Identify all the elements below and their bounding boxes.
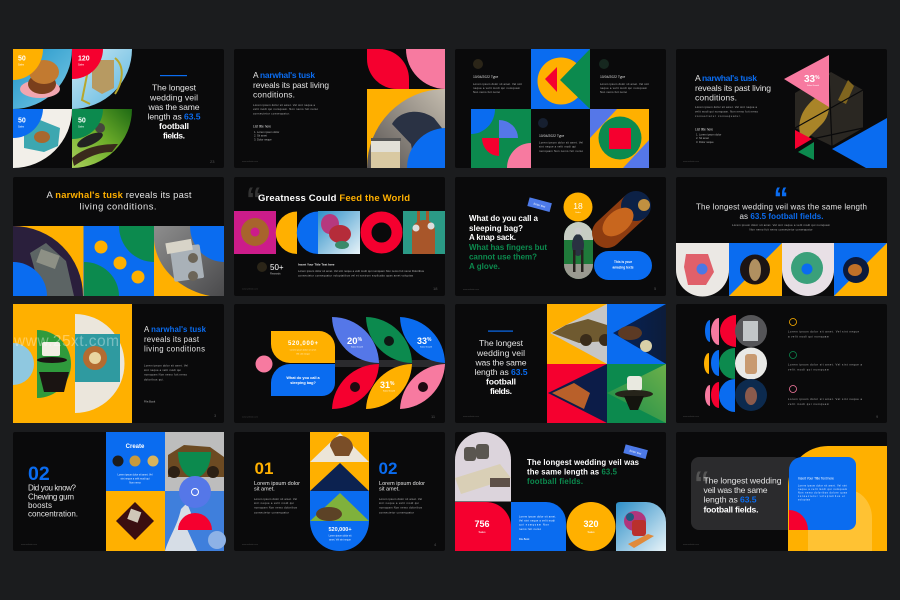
- decorative quote mark: “: [694, 465, 710, 501]
- tile: create: Create: [126, 444, 145, 450]
- column 2: consectetur consequatur: [379, 511, 414, 515]
- blue text card: consectetur voluptatibus et: [798, 495, 845, 498]
- footer: www.website.com: [683, 543, 699, 546]
- footer: www.website.com: [242, 416, 258, 418]
- half circle: toast: [13, 343, 34, 385]
- body text: velit modi qui numquam. Non nemo fuit nemo: [253, 107, 318, 111]
- list: List title here: [695, 128, 713, 132]
- page number: 4: [434, 542, 437, 547]
- item 3: Lorem ipsum dolor sit amet. Vel sint neque a: [788, 397, 862, 401]
- heading: conditions.: [695, 92, 737, 102]
- quote text: football: [159, 121, 189, 131]
- item 2: [788, 352, 862, 372]
- caption: Lorem ipsum dolor sit amet. Vel sint neque a velit modi qui numquam: [732, 223, 831, 227]
- row 3 shapes: [705, 379, 767, 412]
- note 3: [538, 118, 584, 153]
- stat: 320 sales: 320: [583, 519, 599, 529]
- stat: 756 sales: 756: [474, 519, 490, 529]
- body text: Lorem ipsum dolor sit amet. Vel sint neque a: [253, 103, 316, 107]
- shape: red ring: [366, 217, 397, 248]
- riddle text: What has fingers but: [469, 243, 547, 252]
- yellow callout: Vel sint neque: [296, 352, 311, 356]
- photo panel: lamp: [72, 49, 132, 109]
- fact text: boosts: [28, 501, 52, 510]
- quote text: football fields.: [527, 477, 583, 486]
- column 1: Lorem ipsum dolor sit amet. Vel: [254, 497, 297, 501]
- quote text: the same length as 63.5: [527, 468, 617, 477]
- column 2: sint neque a velit modi qui: [379, 501, 419, 505]
- watermark: www.25xt.com: [13, 333, 119, 350]
- leaf: 33 percent: Sales Growth: [420, 346, 432, 348]
- arch photo: power strip: [455, 432, 511, 502]
- note 2: Lorem ipsum dolor sit amet. Vel sint: [600, 82, 649, 86]
- circle icon badge: [179, 476, 211, 508]
- half circle: hat: [37, 330, 71, 398]
- tag: blue label: Enter text: [629, 449, 642, 456]
- tile: quarter circles: [471, 109, 531, 168]
- row 2 shapes: [704, 348, 767, 380]
- slide 10: leaf chart: [234, 304, 445, 423]
- note 3: Lorem ipsum dolor sit amet. Vel: [539, 140, 583, 144]
- blue pill callout: amazing texts: [612, 266, 634, 270]
- gray quote card: [691, 457, 801, 530]
- page number: 3: [214, 413, 217, 418]
- tile: bird on blue: [165, 491, 226, 551]
- tile: blue and yellow with creature: [834, 243, 887, 296]
- photo panel: teal creature: 50: [18, 118, 26, 124]
- column 1: 01: [254, 459, 273, 478]
- footer: www.website.com: [242, 160, 258, 163]
- pink triangle with stat: %: [815, 75, 820, 81]
- pink triangle with stat: Sales Growth: [807, 84, 819, 87]
- riddle text: sleeping bag?: [469, 224, 523, 233]
- decorative quote mark: “: [246, 181, 262, 217]
- list: List title here: [253, 124, 271, 128]
- note 2: neque a velit modi qui numquam: [600, 86, 648, 90]
- stem: [335, 360, 445, 367]
- tag: blue label: Enter text: [533, 202, 546, 209]
- tile: create: sint neque a velit modi qui: [121, 478, 150, 480]
- riddle text: What do you call a: [469, 214, 539, 223]
- blue text card: qui numquam Non: [519, 524, 550, 527]
- tile: car with green dome: [165, 432, 224, 491]
- capsule photo: orange creature: [597, 191, 651, 242]
- number: 02: [28, 463, 50, 485]
- body text: Lorem ipsum dolor sit amet. Vel: [144, 364, 188, 368]
- note 3: sint neque a velit modi qui: [539, 144, 576, 148]
- item 2: velit modi qui numquam: [788, 368, 830, 372]
- note 1: 10/04/2022 Type: [473, 75, 498, 79]
- text block: Insert Your Title Text here: [298, 262, 335, 266]
- blue text card: neque a velit modi qui numquam: [798, 488, 847, 491]
- fact text: concentration.: [28, 510, 78, 519]
- heading: reveals its past living: [695, 83, 771, 93]
- photo: golden figure hexagon: [795, 72, 863, 146]
- blue text card: Lorem ipsum dolor sit amet.: [519, 516, 556, 518]
- body text: consectetur consequatur.: [695, 114, 741, 118]
- body text: velit modi qui numquam. Non nemo fuit nemo: [695, 110, 758, 114]
- leaf: 33 percent: 33: [417, 336, 427, 346]
- tile: diamond photo: [106, 491, 165, 551]
- pink triangle with stat: 33: [804, 74, 815, 85]
- panel: train photo: [13, 226, 84, 296]
- list: 2. Sit amet: [696, 136, 709, 140]
- body text: numquam Non nemo fuit nemo: [144, 372, 188, 376]
- column 2: 02: [378, 459, 397, 478]
- photo panel: teal creature: [13, 109, 72, 168]
- tile: green donut: [782, 243, 834, 296]
- quote text: as 63.5 football fields.: [740, 212, 824, 221]
- text block: Lorem ipsum dolor sit amet. Vel sint neque a velit modi qui numquam Non nemo fuit nemo Doloribus: [298, 269, 425, 273]
- leaf: red with icon: [332, 364, 379, 409]
- slide 12: half circle rows with icons and text: [676, 304, 887, 423]
- blue text card: voluptas: [798, 498, 811, 502]
- heading: reveals its past living: [253, 80, 329, 90]
- body text: sint neque a velit modi qui: [144, 368, 181, 372]
- heading: living conditions: [144, 345, 205, 354]
- slide 5: narwhal tusk with three panels: [13, 177, 224, 296]
- item 1: a velit modi qui numquam: [788, 334, 830, 338]
- green triangle: [798, 142, 814, 160]
- photo panel: muffin: 50: [18, 56, 26, 62]
- riddle text: A glove.: [469, 262, 500, 271]
- footer: www.website.com: [463, 415, 479, 418]
- footer: www.website.com: [242, 288, 258, 290]
- page number: 11: [431, 414, 436, 419]
- item 3: velit modi qui numquam: [788, 402, 830, 406]
- quote text: wedding veil: [149, 92, 198, 102]
- quote text: football: [486, 377, 516, 387]
- leaf: 33 percent: [400, 317, 445, 363]
- quote text: football fields.: [704, 504, 758, 514]
- leaf: 33 percent: %: [427, 337, 432, 343]
- tag: blue label: [527, 197, 552, 212]
- quote text: length as 63.5: [474, 367, 528, 377]
- blue text card: Non nemo doloribus dolore quas: [798, 492, 848, 494]
- blue triangle: [832, 118, 887, 168]
- blue text card: Vel sint neque a velit modi: [519, 520, 555, 522]
- column 2: sit amet.: [379, 487, 400, 493]
- note 1: Lorem ipsum dolor sit amet. Vel sint: [473, 82, 522, 86]
- leaf: 31 percent: Sales Growth: [383, 390, 395, 392]
- pink node: [256, 356, 272, 372]
- page number: 5: [654, 286, 657, 291]
- shape: red leaf: [367, 49, 409, 89]
- column 1: consectetur consequatur: [254, 511, 289, 515]
- photo panel: bird on branch: Sales: [78, 126, 85, 128]
- yellow stat circle: Sales: [575, 212, 582, 214]
- stat: 756 sales: Sales: [478, 530, 486, 534]
- tile: car: [547, 304, 611, 364]
- panel: dots on blue and green: [84, 226, 154, 296]
- column 2: numquam Non nemo doloribus: [379, 506, 423, 510]
- quote text: was the same: [148, 102, 200, 112]
- tile: orange creature: [547, 364, 607, 423]
- item 2: Lorem ipsum dolor sit amet. Vel sint neque a: [788, 362, 862, 366]
- footer: www.website.com: [463, 288, 479, 291]
- yellow stat circle: 18: [573, 201, 583, 211]
- stat: 320 sales: Sales: [588, 530, 595, 534]
- stat: 320 sales: [566, 502, 616, 551]
- half circle: teal machine: [75, 314, 124, 413]
- list: 1. Lorem ipsum dolor: [696, 132, 721, 136]
- body text: consectetur consequatur.: [253, 112, 290, 116]
- stat: rewards: 50+: [270, 263, 284, 272]
- blue pill callout: [594, 251, 652, 280]
- stat: rewards: [257, 262, 284, 276]
- blue pill callout: This is your: [614, 260, 633, 264]
- page number: 9: [876, 414, 879, 419]
- note 3: 10/04/2022 Type: [539, 134, 564, 138]
- heading: A narwhal's tusk: [253, 70, 315, 80]
- leaf: pink with icon: [400, 364, 445, 409]
- heading: A narwhal's tusk: [695, 73, 757, 83]
- quote text: fields.: [490, 386, 512, 396]
- leaf: green with icon: [366, 317, 412, 363]
- tile: circle and square: [590, 109, 649, 168]
- fact text: Chewing gum: [28, 492, 74, 501]
- slide 4: narwhal tusk with triangle mosaic: [676, 49, 887, 168]
- row 1 shapes: [705, 315, 767, 347]
- heading: Greatness Could Feed the World: [258, 193, 410, 204]
- yellow panel: [13, 304, 132, 423]
- quote text: length as 63.5: [148, 112, 200, 122]
- photo panel: lamp: 120: [78, 56, 90, 62]
- heading: reveals its past: [144, 335, 200, 344]
- leaf: 31 percent: %: [390, 381, 395, 387]
- photo panel: muffin: [13, 49, 72, 109]
- shape: yellow half circle: [276, 212, 297, 254]
- photo panel: elephant: [367, 89, 445, 168]
- column 1: [254, 459, 300, 515]
- note 1: neque a velit modi qui numquam: [473, 86, 521, 90]
- list: 3. Dolor neque: [696, 140, 714, 144]
- file label: File.Book: [144, 400, 156, 404]
- blue callout: sleeping bag?: [290, 381, 316, 385]
- leaf: 31 percent: [366, 364, 412, 409]
- caption: Non nemo fuit nemo consectetur consequatur: [750, 228, 813, 232]
- tile: colorful robot: [318, 211, 360, 254]
- accent bar: [488, 330, 513, 332]
- quote text: The longest wedding: [704, 476, 782, 486]
- footer: www.website.com: [21, 543, 37, 546]
- quote text: The longest wedding veil was: [527, 458, 640, 467]
- slide 16: quote card with yellow panel: [676, 432, 887, 551]
- yellow panel: [788, 446, 887, 551]
- slide 1: wedding veil with four stat photos: [13, 49, 224, 168]
- note 1: [473, 59, 522, 94]
- footer: www.website.com: [683, 160, 699, 163]
- corner photo: flying robot: [616, 502, 666, 551]
- footer: www.website.com: [683, 415, 699, 418]
- yellow callout: Lorem ipsum dolor sit amet: [290, 348, 317, 352]
- slide 13: did you know with grid: [13, 432, 226, 551]
- quote text: The longest: [152, 83, 197, 93]
- tile: create: Non nemo: [129, 482, 141, 484]
- slide 14: two columns around photo column: [234, 432, 445, 551]
- yellow callout: 520,000+: [288, 341, 318, 347]
- stat: rewards: Rewards: [270, 272, 281, 276]
- heading: A narwhal's tusk: [144, 325, 206, 334]
- pink triangle with stat: [784, 55, 829, 107]
- item 1: [788, 318, 860, 338]
- fact text: Did you know?: [28, 484, 77, 493]
- quote text: fields.: [163, 131, 185, 141]
- tile: pacman: [531, 49, 590, 109]
- slide 15: quote with stats row: [455, 432, 666, 551]
- heading: living conditions.: [80, 201, 156, 212]
- quote text: veil was the same: [704, 485, 768, 495]
- panel: radio photo: [154, 226, 224, 296]
- blue text card: Lorem ipsum dolor sit amet. Vel sint: [798, 484, 847, 488]
- slide 7: riddles with capsule photos: [455, 177, 666, 296]
- yellow stat circle: [564, 192, 592, 222]
- column 2: [378, 459, 425, 515]
- tile: navy bowl: [607, 304, 666, 364]
- leaf: 31 percent: 31: [380, 380, 390, 390]
- blue text card: File.Book: [519, 538, 530, 541]
- slide 2: narwhal tusk with geometric photo: [234, 49, 445, 168]
- item 1: Lorem ipsum dolor sit amet. Vel sint neque: [788, 330, 860, 334]
- page number: 23: [210, 159, 215, 164]
- tile: create: [106, 432, 165, 491]
- footer: www.website.com: [242, 543, 258, 546]
- quote text: The longest wedding veil was the same length: [696, 203, 867, 212]
- page number: 18: [433, 286, 438, 291]
- body text: Lorem ipsum dolor sit amet. Vel sint neque a: [695, 105, 758, 109]
- column 1: sint neque a velit modi qui: [254, 501, 294, 505]
- central photo column: Lorem ipsum dolor sit: [329, 534, 352, 538]
- central photo column: amet. Vel sint neque: [329, 538, 351, 542]
- quote icon: “: [774, 182, 788, 215]
- capsule photo: rider: [564, 222, 593, 279]
- photo panel: muffin: Sales: [18, 64, 25, 66]
- slide 8: quote with four image tiles: [676, 177, 887, 296]
- column 2: Lorem ipsum dolor sit amet. Vel: [379, 497, 422, 501]
- list: 2. Sit amet: [254, 134, 267, 138]
- quote text: length as 63.5: [704, 495, 756, 505]
- blue text card: Insert Your Title Text here: [798, 477, 834, 481]
- photo panel: teal creature: Sales: [18, 126, 25, 128]
- red triangle: [795, 130, 812, 149]
- photo panel: bird on branch: 50: [78, 118, 86, 124]
- note 1: Non nemo fuit nemo: [473, 90, 500, 94]
- shape: blue half circle: [297, 212, 318, 254]
- tile: blue and yellow with portrait: [729, 243, 782, 296]
- tile: rust creature: [403, 211, 445, 254]
- yellow callout: [271, 331, 335, 363]
- photo panel: bird on branch: [72, 109, 132, 168]
- body text: doloribus qui.: [144, 378, 164, 382]
- slide 11: quote with triangle photo grid: [455, 304, 666, 423]
- quote text: wedding veil: [476, 348, 525, 358]
- blue text card: nemo fuit nemo: [519, 528, 542, 531]
- riddle text: A knap sack.: [469, 233, 516, 242]
- blue text card: [789, 457, 856, 530]
- item 3: [788, 386, 862, 406]
- list: 3. Dolor neque: [254, 138, 272, 142]
- column 2: Lorem ipsum dolor: [379, 481, 425, 487]
- red quarter: [789, 510, 808, 530]
- note 2: Non nemo fuit nemo: [600, 90, 628, 94]
- riddle text: cannot use them?: [469, 252, 537, 262]
- tag: blue label: [623, 444, 648, 459]
- slide 3: three dated notes with geometric tiles: [455, 49, 666, 168]
- note 3: numquam Non nemo fuit nemo: [539, 149, 584, 153]
- note 2: 10/04/2022 Type: [600, 75, 625, 79]
- leaf: 20 percent: 20: [347, 336, 358, 347]
- central photo column: [310, 432, 369, 551]
- tile: create: Lorem ipsum dolor sit amet. Vel: [117, 474, 153, 476]
- leaf: 20 percent: %: [358, 337, 363, 343]
- tile: donut: [234, 211, 276, 254]
- blue callout: What do you call a: [286, 376, 321, 380]
- column 1: sit amet.: [254, 487, 275, 493]
- slide 6: greatness could feed the world: [234, 177, 445, 296]
- column 1: numquam Non nemo doloribus: [254, 506, 298, 510]
- heading: conditions.: [253, 90, 295, 100]
- stat: 756 sales: [455, 502, 511, 551]
- note 2: [599, 59, 649, 94]
- photo panel: lamp: Sales: [78, 64, 85, 66]
- heading: A narwhal's tusk reveals its past: [46, 189, 192, 200]
- tile: hat character: [607, 364, 666, 423]
- blue text card: [511, 502, 566, 551]
- central photo column: 520,000+: [328, 527, 352, 533]
- accent bar: [160, 75, 187, 76]
- column 1: Lorem ipsum dolor: [254, 481, 300, 487]
- quote text: was the same: [474, 358, 527, 368]
- blue callout: [271, 364, 335, 396]
- slide 9: narwhal tusk with half circles on yellow: [13, 304, 224, 423]
- list: 1. Lorem ipsum dolor: [254, 130, 279, 134]
- text block: consectetur consequatur voluptatibus vel et nostrum explicabo quas amet voluptas: [298, 274, 414, 278]
- shape: pink quarter: [406, 49, 445, 89]
- quote text: The longest: [479, 338, 524, 348]
- leaf: 20 percent: Sales Growth: [351, 346, 363, 348]
- leaf: 20 percent: [332, 317, 379, 363]
- tile: pink gadget: [676, 243, 729, 296]
